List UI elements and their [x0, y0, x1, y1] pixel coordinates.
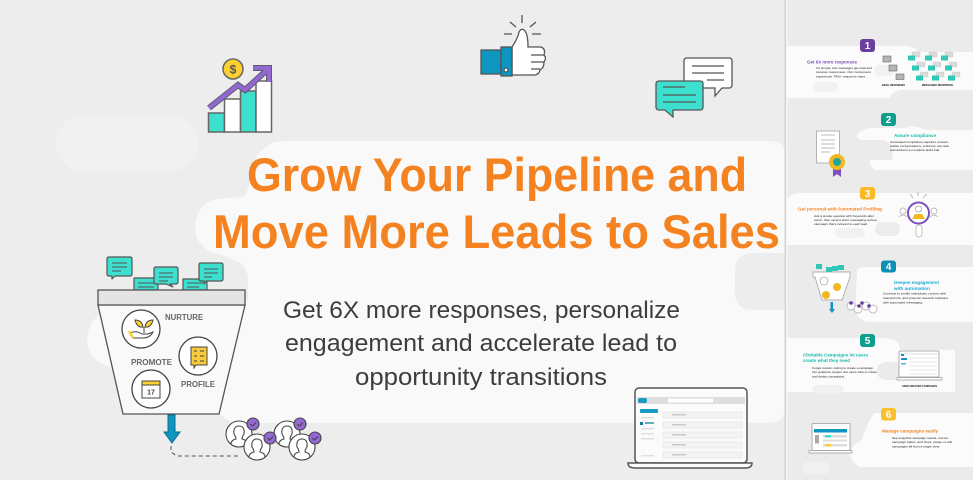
- step 2: and delivers a complete audit trail.: [890, 148, 940, 152]
- funnel: promote: PROMOTE: [131, 358, 173, 367]
- icon: people with checks: [226, 418, 321, 460]
- step 6: campaign status, and clone, pause or edit: [892, 440, 952, 444]
- step 5: create what they need: [803, 358, 850, 363]
- step 1: receive responses. Our customers: [816, 70, 872, 74]
- step 5: [803, 334, 942, 388]
- step 3: [798, 187, 938, 237]
- subtitle: opportunity transitions: [355, 364, 607, 391]
- step 2: 2: [886, 115, 892, 126]
- icon: growth chart with coin: [208, 59, 272, 132]
- step 3: Ask a simple question with Keywords after: [814, 214, 874, 218]
- title: Move More Leads to Sales: [213, 205, 780, 258]
- icon: laptop with dashboard: [628, 388, 752, 468]
- subtitle: [283, 297, 680, 391]
- step 1: MESSAGING RESPONSES: [922, 83, 953, 87]
- step 5: and deploy campaigns.: [812, 374, 845, 378]
- subtitle: Get 6X more responses, personalize: [283, 297, 680, 324]
- funnel: profile: PROFILE: [181, 380, 216, 389]
- step 6: 6: [886, 410, 892, 421]
- step 1: EMAIL RESPONSES: [882, 83, 905, 87]
- step 1: Get 6X more responses: [807, 60, 857, 64]
- title: Grow Your Pipeline and: [247, 148, 747, 201]
- funnel: nurture: [122, 310, 204, 348]
- step 6: Manage campaigns easily: [882, 428, 938, 434]
- icon: speech bubbles above funnel: [107, 257, 223, 290]
- step 4: [813, 260, 949, 313]
- funnel: nurture: NURTURE: [165, 313, 204, 322]
- step 1: [807, 39, 960, 87]
- step 2: [816, 113, 950, 177]
- step 4: relevant info, and promote research solutions: [883, 296, 949, 300]
- dashed connector: [171, 446, 238, 456]
- step 3: campaign that's relevant to each lead.: [814, 222, 868, 226]
- step 4: with automation: [893, 286, 930, 291]
- step 5: Our guidance system lets users click to create: [812, 370, 877, 374]
- step 3: 3: [865, 189, 871, 200]
- step 5: Clickable Campaigns let users: [803, 352, 868, 358]
- funnel graphic: [98, 257, 321, 460]
- step 5: USER CREATED CAMPAIGNS: [902, 384, 937, 388]
- step 6: campaigns all from a single view.: [892, 444, 940, 448]
- step 1: experience 79%+ response rates.: [816, 74, 866, 78]
- arrow: funnel output: [164, 415, 180, 443]
- step 4: Continue to profile individuals, nurture with: [883, 292, 946, 296]
- step 5: 5: [865, 336, 871, 347]
- icon: growth chart with coin: $: [230, 62, 237, 76]
- funnel body: [98, 290, 245, 414]
- step 4: with automated messaging.: [883, 300, 923, 304]
- step 4: 4: [886, 262, 892, 273]
- step 6: See snapshot campaign results, current: [892, 436, 948, 440]
- funnel: promote: [131, 358, 173, 408]
- step 2: tracks conversations, enforces opt-outs: [890, 144, 950, 148]
- step 1: 1: [865, 41, 871, 52]
- funnel: promote: 17: [147, 390, 155, 396]
- funnel: profile: [179, 337, 217, 389]
- background clouds: [56, 116, 785, 423]
- step 2: Assure compliance: [894, 133, 936, 138]
- icon: chat bubbles: [656, 58, 732, 117]
- step 2: Automated compliance captures consent,: [890, 140, 949, 144]
- step 3: Get personal with Automated Profiling: [798, 206, 882, 212]
- sidebar panel: [784, 0, 973, 480]
- title: [213, 148, 780, 258]
- icon: thumbs up: [481, 15, 546, 76]
- step 1: It's simple; text messages get read and: [816, 66, 872, 70]
- subtitle: engagement and accelerate lead to: [285, 330, 677, 357]
- step 6: [809, 408, 952, 453]
- step 4: Deepen engagement: [894, 280, 940, 285]
- step 3: opt-in, then send a short messaging nurture: [814, 218, 877, 222]
- step 5: Forget custom coding to create a campaign.: [812, 366, 874, 370]
